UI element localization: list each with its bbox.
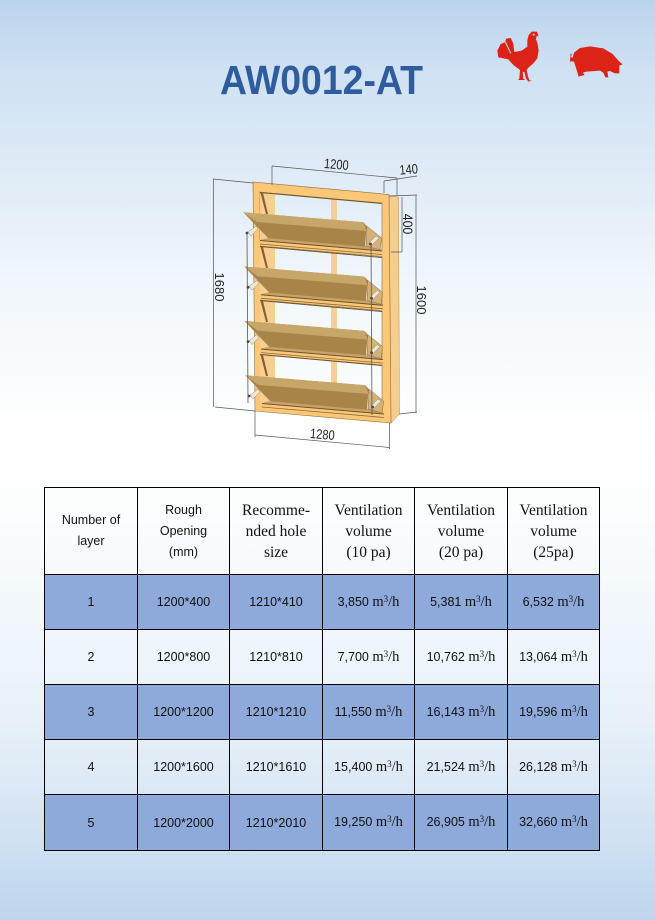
dimension labels: 140 <box>399 161 419 178</box>
row: 5 layers: 19,250 m3/h <box>334 814 403 830</box>
row: 3 layers <box>45 685 599 739</box>
row: 3 layers: 16,143 m3/h <box>427 704 495 720</box>
row: 4 layers: 4 <box>88 760 94 774</box>
row: 1 layer: 3,850 m3/h <box>338 594 399 610</box>
row: 2 layers: 10,762 m3/h <box>427 648 495 664</box>
table header row: Rough <box>165 502 202 516</box>
row: 3 layers: 1210*1210 <box>246 705 306 719</box>
table header row: (25pa) <box>533 544 574 560</box>
table header row: (10 pa) <box>346 544 391 560</box>
louver 2 <box>244 267 383 309</box>
row: 1 layer: 1210*410 <box>249 595 303 609</box>
table header row: volume <box>438 522 484 540</box>
row: 4 layers <box>88 758 588 774</box>
icon: rooster <box>497 32 539 82</box>
row: 2 layers: 1200*800 <box>157 650 210 664</box>
table header row: Opening <box>160 524 207 538</box>
row: 1 layer: 5,381 m3/h <box>430 594 492 610</box>
row: 3 layers: 19,596 m3/h <box>519 704 588 720</box>
dimension labels: 1200 <box>323 156 349 173</box>
row: 4 layers: 26,128 m3/h <box>519 758 588 774</box>
dimension lines <box>213 166 417 449</box>
table header row: (20 pa) <box>439 544 483 560</box>
table header row: (mm) <box>169 544 198 558</box>
row: 5 layers: 5 <box>88 816 94 830</box>
row: 5 layers: 1200*2000 <box>153 816 214 830</box>
table header row: Recomme- <box>242 502 310 518</box>
table header row: Ventilation <box>519 502 588 518</box>
louver 1 <box>243 212 382 254</box>
specification table <box>44 487 600 851</box>
side panel <box>389 196 400 423</box>
row: 1 layer: 1200*400 <box>157 595 210 609</box>
table header row <box>45 502 599 850</box>
icon: pig <box>570 46 623 78</box>
dimension labels: 400 <box>400 214 416 234</box>
row: 1 layer: 6,532 m3/h <box>523 594 584 610</box>
table header row: volume <box>345 522 392 540</box>
table header row: Number of <box>62 513 120 527</box>
row: 2 layers: 13,064 m3/h <box>519 648 588 664</box>
row: 2 layers: 7,700 m3/h <box>338 648 399 664</box>
row: 3 layers: 1200*1200 <box>153 705 214 719</box>
dimension labels: 1280 <box>309 426 335 443</box>
table header row: Ventilation <box>427 502 495 518</box>
louver 4 <box>245 375 384 418</box>
table header row: nded hole <box>246 522 306 540</box>
row: 5 layers: 32,660 m3/h <box>519 814 588 830</box>
dimension labels <box>212 156 429 443</box>
row: 2 layers: 1210*810 <box>249 650 303 664</box>
row: 5 layers: 1210*2010 <box>246 816 306 830</box>
louver 3 <box>244 321 383 363</box>
row: 1 layer: 1 <box>88 595 94 609</box>
row: 2 layers <box>88 648 588 664</box>
frame <box>253 182 391 423</box>
row: 3 layers: 11,550 m3/h <box>335 704 402 720</box>
table header row: size <box>264 544 288 560</box>
title: AW0012-AT <box>220 57 423 103</box>
row: 4 layers: 15,400 m3/h <box>334 758 403 774</box>
row: 5 layers: 26,905 m3/h <box>427 814 495 830</box>
table header row: volume <box>530 522 577 540</box>
row: 5 layers <box>45 795 599 850</box>
dimension labels: 1680 <box>212 273 227 301</box>
row: 3 layers: 3 <box>88 705 94 719</box>
row: 4 layers: 1200*1600 <box>153 760 214 774</box>
table header row: Ventilation <box>334 502 403 518</box>
row: 2 layers: 2 <box>88 650 94 664</box>
row: 4 layers: 21,524 m3/h <box>427 758 495 774</box>
louver diagram <box>212 156 429 449</box>
window posts <box>260 192 382 410</box>
dimension labels: 1600 <box>414 286 429 314</box>
linkage rods <box>247 233 372 415</box>
table header row: layer <box>77 534 105 548</box>
row: 1 layer <box>45 575 599 629</box>
row: 4 layers: 1210*1610 <box>246 760 306 774</box>
